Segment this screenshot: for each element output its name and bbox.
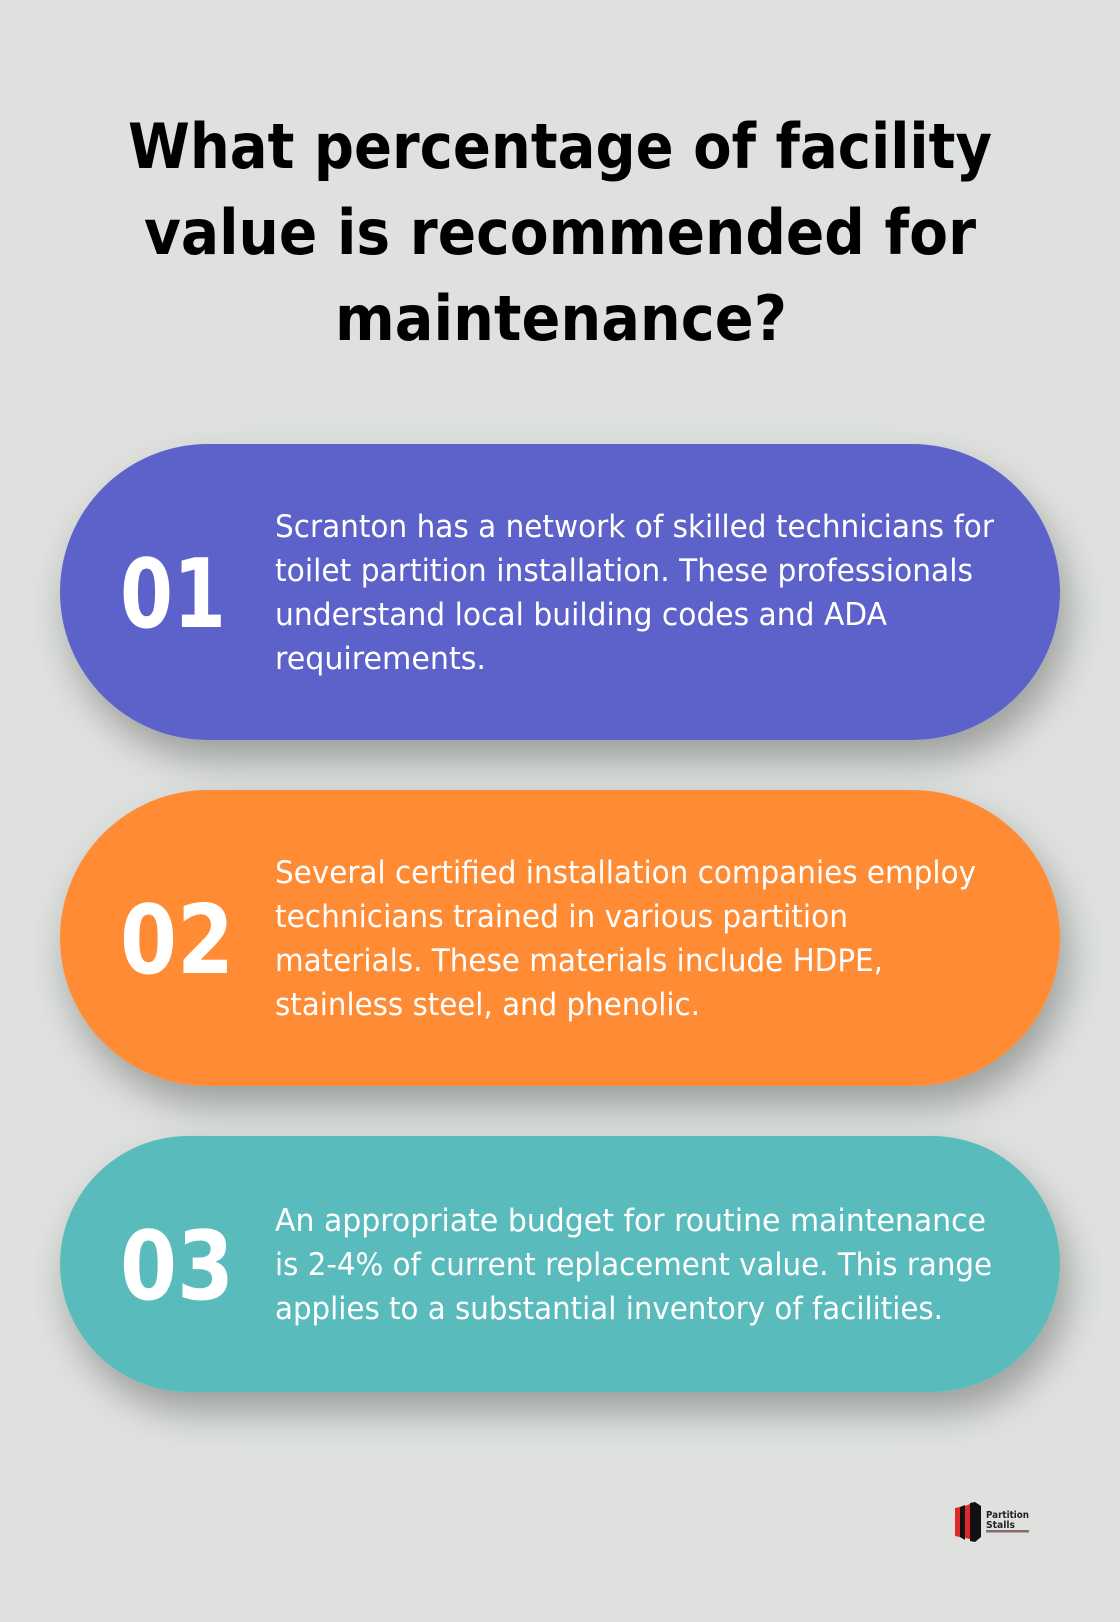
pill background 01 [60, 444, 1060, 740]
text block 01: requirements. [275, 641, 486, 677]
pill background 02 [60, 790, 1060, 1086]
title: value is recommended for [144, 196, 976, 269]
text block 02: materials. These materials include HDPE, [275, 943, 883, 979]
number 02: 02 [120, 886, 234, 996]
title: maintenance? [335, 282, 787, 355]
text block 03: applies to a substantial inventory of facilities. [275, 1291, 943, 1327]
logo wordmark: Stalls [986, 1520, 1015, 1531]
icon: partition bars [955, 1502, 981, 1542]
text block 01: toilet partition installation. These professionals [275, 553, 973, 589]
text block 02: technicians trained in various partition [275, 899, 848, 935]
text block 02 [275, 855, 976, 1023]
panel: step 03 [60, 1136, 1060, 1392]
text block 02: stainless steel, and phenolic. [275, 987, 700, 1023]
text block 03: is 2-4% of current replacement value. This range [275, 1247, 992, 1283]
text block 03: An appropriate budget for routine maintenance [275, 1203, 986, 1239]
panel: step 02 [60, 790, 1060, 1086]
logo wordmark [986, 1510, 1029, 1531]
text block 01: understand local building codes and ADA [275, 597, 887, 633]
panel: step 01 [60, 444, 1060, 740]
title: What percentage of facility [128, 110, 992, 183]
pill background 03 [60, 1136, 1060, 1392]
logo wordmark: Partition [986, 1510, 1029, 1521]
title [128, 110, 992, 355]
text block 02: Several certified installation companies employ [275, 855, 976, 891]
logo: Partition Stalls [955, 1502, 1029, 1542]
text block 03 [275, 1203, 992, 1327]
number 01: 01 [120, 540, 226, 650]
number 03: 03 [120, 1212, 234, 1322]
text block 01: Scranton has a network of skilled technicians for [275, 509, 994, 545]
text block 01 [275, 509, 994, 677]
